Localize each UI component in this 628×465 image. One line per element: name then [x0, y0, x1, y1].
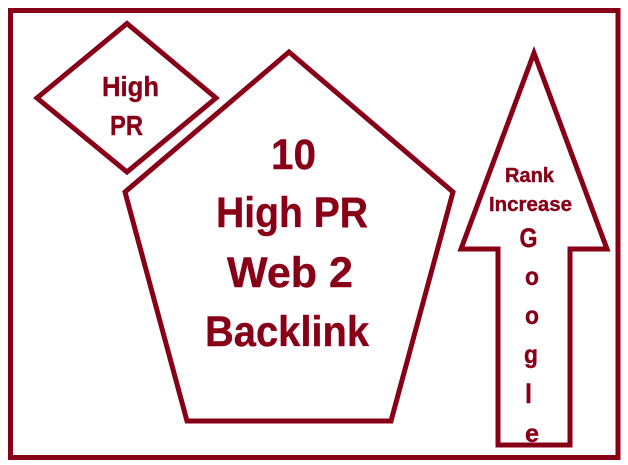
arrow: Rank Increase Google: e — [525, 420, 539, 448]
arrow: Rank Increase Google: Rank — [505, 165, 555, 187]
arrow: Rank Increase Google: G — [520, 223, 538, 253]
pentagon: 10 High PR Web 2 Backlink: Web 2 — [227, 249, 353, 297]
arrow: Rank Increase Google: Increase — [489, 194, 572, 216]
pentagon: 10 High PR Web 2 Backlink: Backlink — [205, 308, 369, 356]
arrow: Rank Increase Google — [461, 53, 607, 448]
diamond: High PR: PR — [110, 110, 143, 141]
arrow: Rank Increase Google: o — [525, 302, 539, 330]
diamond: High PR: High — [102, 71, 159, 102]
arrow: Rank Increase Google: l — [525, 379, 532, 409]
pentagon: 10 High PR Web 2 Backlink: 10 — [271, 131, 316, 179]
arrow: Rank Increase Google: o — [525, 263, 539, 291]
pentagon: 10 High PR Web 2 Backlink: High PR — [216, 189, 368, 237]
arrow: Rank Increase Google: g — [524, 341, 538, 369]
pentagon: 10 High PR Web 2 Backlink — [125, 52, 453, 421]
diamond: High PR — [37, 24, 216, 172]
